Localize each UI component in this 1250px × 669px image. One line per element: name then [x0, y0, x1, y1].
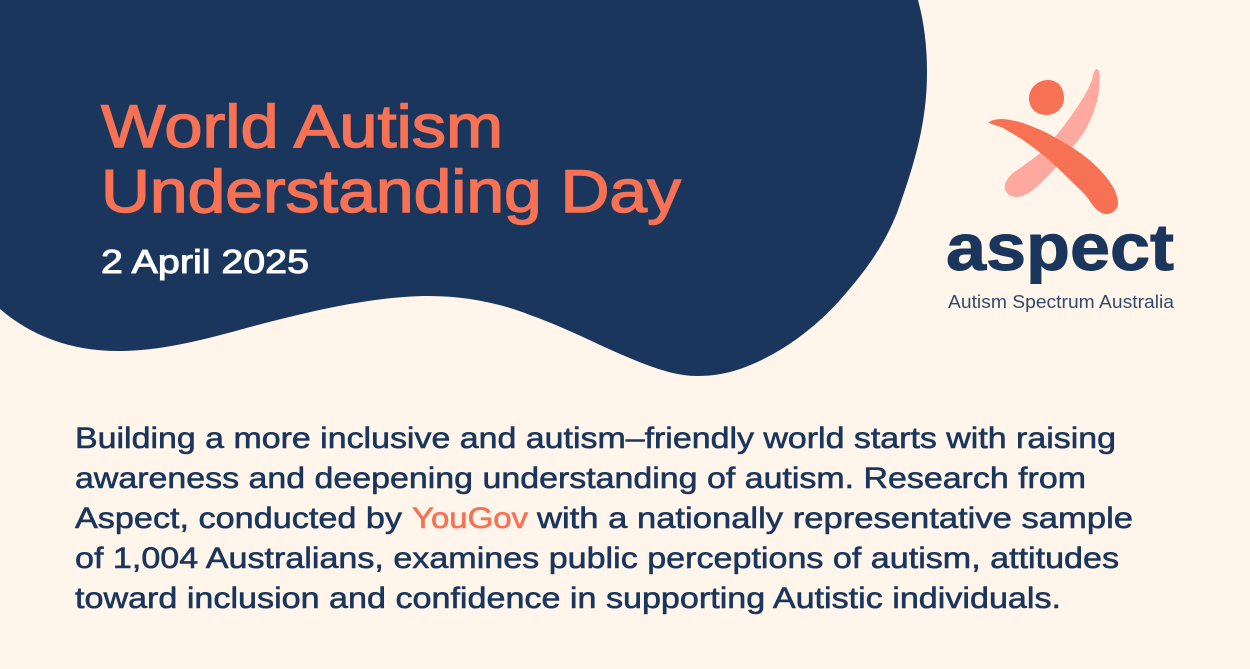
- title: Understanding Day: [101, 158, 681, 225]
- body text: Building a more inclusive and autism–friendly world starts with raising: [75, 422, 1116, 455]
- body text: Aspect, conducted by: [75, 502, 402, 535]
- date: 2 April 2025: [101, 244, 309, 281]
- body text: toward inclusion and confidence in supporting Autistic individuals.: [75, 582, 1061, 615]
- body text: of 1,004 Australians, examines public perceptions of autism, attitudes: [75, 542, 1119, 575]
- body text: [75, 422, 1133, 615]
- title: World Autism: [101, 93, 503, 160]
- navy blob header panel: [0, 0, 927, 376]
- icon: aspect figure: [989, 69, 1118, 214]
- tagline: Autism Spectrum Australia: [948, 292, 1175, 312]
- logo: [946, 69, 1175, 312]
- body text: with a nationally representative sample: [536, 502, 1133, 535]
- title: [101, 93, 681, 225]
- body text: awareness and deepening understanding of autism. Research from: [75, 462, 1086, 495]
- wordmark: aspect: [946, 210, 1174, 284]
- body text: YouGov: [412, 502, 528, 535]
